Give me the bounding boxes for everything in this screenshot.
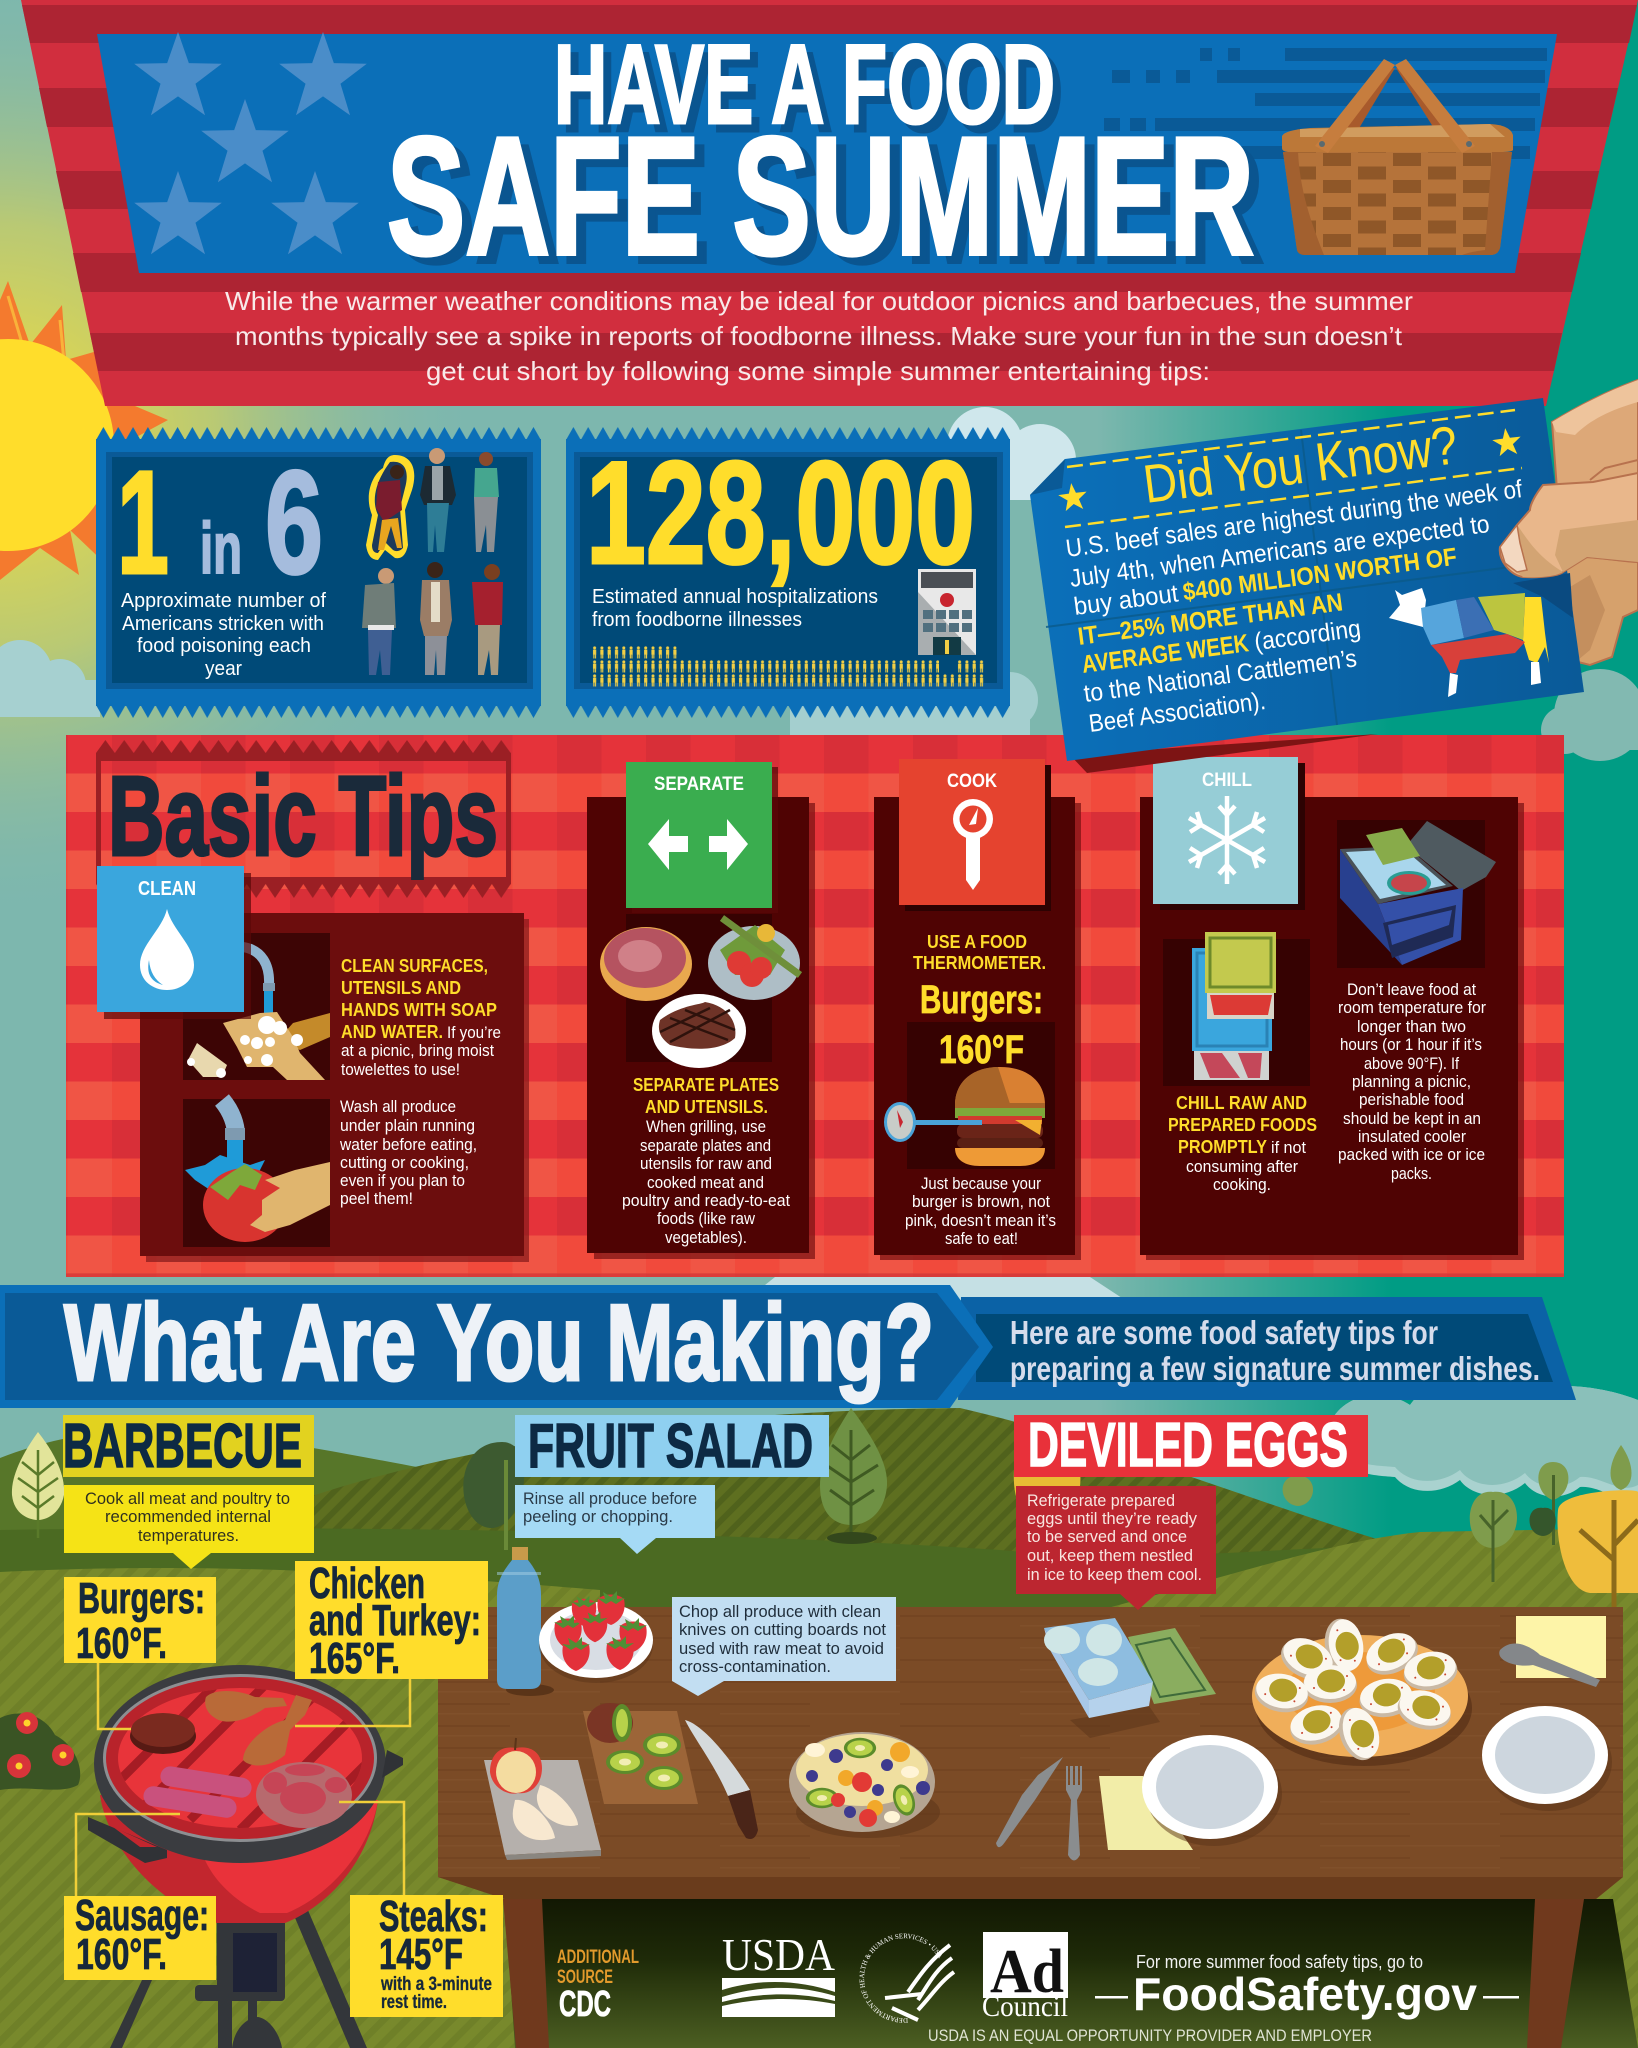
- bush with flowers: [0, 1712, 80, 1790]
- did you know text: [1064, 475, 1524, 738]
- heading: What Are You Making?: [64, 1282, 934, 1404]
- callout: refrigerate eggs: eggs until they’re ready: [1027, 1509, 1197, 1528]
- separate text: AND UTENSILS.: [645, 1097, 768, 1117]
- connector lines: [76, 1663, 410, 1896]
- cook text: burger is brown, not: [912, 1192, 1050, 1211]
- callout: chop produce: knives on cutting boards not: [679, 1620, 886, 1639]
- header banner: [21, 0, 1638, 406]
- people illustration: [362, 448, 503, 675]
- clean text: AND WATER.: [341, 1022, 443, 1042]
- panel: 1 in 6 statistic: [96, 427, 541, 718]
- clean text: cutting or cooking,: [340, 1153, 469, 1172]
- chill text: packs.: [1391, 1164, 1432, 1183]
- image: cooler: [1337, 820, 1496, 968]
- cook text: Burgers:: [920, 978, 1043, 1022]
- chill text: above 90°F). If: [1364, 1054, 1459, 1073]
- cook text: 160°F: [939, 1028, 1024, 1072]
- callout: refrigerate eggs: to be served and once: [1027, 1527, 1187, 1546]
- intro text: [225, 286, 1413, 386]
- callout: cook all meat: recommended internal: [105, 1507, 271, 1526]
- panel: chill: [1140, 757, 1524, 1260]
- callout: rinse produce: [515, 1485, 715, 1554]
- clouds behind statistics: [0, 407, 1638, 1300]
- under table shadow: [505, 1899, 1638, 2048]
- logo: Ad Council: Council: [982, 1990, 1068, 2023]
- title: SAFE SUMMER: [387, 102, 1254, 290]
- logo: Ad Council: [982, 1932, 1068, 2023]
- stars: [134, 32, 367, 254]
- image: burger: [884, 1022, 1055, 1169]
- did you know text: $400 MILLION WORTH OF: [1181, 543, 1458, 607]
- panel: cook: [874, 759, 1081, 1260]
- card: clean: CLEAN: [138, 878, 196, 900]
- illustration: eggs on ice: [1044, 1618, 1216, 1738]
- heading: barbecue: BARBECUE: [63, 1412, 302, 1481]
- call to action: For more summer food safety tips, go to: [1136, 1952, 1423, 1972]
- additional source: CDC: [559, 1983, 611, 2024]
- illustration: kiwi on cutting board: [583, 1703, 698, 1810]
- chill text: PREPARED FOODS: [1168, 1115, 1317, 1135]
- callout: rinse produce: peeling or chopping.: [523, 1507, 673, 1526]
- chill text: planning a picnic,: [1352, 1072, 1471, 1091]
- cook text: Just because your: [921, 1174, 1041, 1193]
- intro text: months typically see a spike in reports of foodborne illness. Make sure your fun in the sun doesn’t: [235, 321, 1403, 351]
- chill text: consuming after: [1186, 1157, 1298, 1176]
- stat caption: Americans stricken with: [122, 613, 324, 635]
- clean text: under plain running: [340, 1116, 475, 1135]
- image: hand washing: [183, 933, 330, 1080]
- icon: finger holding card: [1500, 473, 1638, 577]
- separate text: separate plates and: [640, 1136, 771, 1155]
- image: food containers: [1163, 932, 1310, 1086]
- callout: chop produce: cross-contamination.: [679, 1657, 831, 1676]
- chill text: PROMPTLY: [1178, 1137, 1267, 1157]
- disclaimer: USDA IS AN EQUAL OPPORTUNITY PROVIDER AND EMPLOYER: [928, 2026, 1372, 2045]
- big number: 128,000: [586, 431, 975, 594]
- panel: did you know card: [1030, 398, 1584, 773]
- separate text: utensils for raw and: [640, 1154, 772, 1173]
- illustration: water bottle: [497, 1547, 554, 1696]
- callout: chop produce: used with raw meat to avoid: [679, 1639, 884, 1658]
- ribbon: subheading: [958, 1297, 1576, 1400]
- illustration: knife: [685, 1720, 758, 1839]
- heading: fruit salad: FRUIT SALAD: [528, 1412, 813, 1481]
- separate text: cooked meat and: [647, 1173, 764, 1192]
- heading: basic tips: Basic Tips: [108, 753, 498, 879]
- title: HAVE A FOOD: [562, 30, 1063, 155]
- card: separate: [626, 762, 778, 913]
- did you know text: Beef Association).: [1087, 687, 1267, 738]
- image: washing tomato: [183, 1099, 330, 1247]
- section: barbecue: [63, 1412, 503, 2017]
- people rows: [591, 646, 984, 687]
- separate text: SEPARATE PLATES: [633, 1075, 779, 1095]
- big number: 1: [117, 441, 169, 605]
- blue title panel: [97, 32, 1557, 273]
- heading: did you know: Did You Know?: [1140, 415, 1461, 515]
- stat caption: Estimated annual hospitalizations: [592, 586, 878, 608]
- picnic table: [438, 1607, 1623, 1899]
- heading: deviled eggs: DEVILED EGGS: [1028, 1411, 1348, 1480]
- chill text: insulated cooler: [1358, 1127, 1466, 1146]
- call to action: FoodSafety.gov: [1133, 1968, 1477, 2020]
- cook text: USE A FOOD: [927, 932, 1027, 952]
- title: HAVE A FOOD: [554, 22, 1055, 147]
- additional source: [557, 1947, 639, 2024]
- title: SAFE SUMMER: [397, 110, 1264, 298]
- clean text: peel them!: [340, 1189, 413, 1208]
- icon: hospital: [918, 569, 976, 655]
- additional source: SOURCE: [557, 1967, 613, 1988]
- label: chicken and turkey: and Turkey:: [309, 1596, 481, 1645]
- panel: basic tips tablecloth: [66, 735, 1564, 1277]
- callout: refrigerate eggs: Refrigerate prepared: [1027, 1491, 1175, 1510]
- callout: refrigerate eggs: [1016, 1486, 1216, 1610]
- cook text: safe to eat!: [945, 1229, 1018, 1248]
- chill text: packed with ice or ice: [1338, 1145, 1485, 1164]
- chill text: hours (or 1 hour if it’s: [1340, 1035, 1482, 1054]
- stat caption: food poisoning each: [137, 635, 311, 657]
- clean text: towelettes to use!: [341, 1060, 460, 1079]
- logo: USDA: [722, 1929, 835, 2017]
- label: sausage: 160°F.: [76, 1930, 167, 1979]
- stat caption: [592, 586, 878, 631]
- logo: Ad Council: Ad: [990, 1938, 1064, 2006]
- label: steaks: 145°F: [379, 1930, 463, 1979]
- chill text: CHILL RAW AND: [1176, 1093, 1307, 1113]
- clean text: water before eating,: [339, 1135, 477, 1154]
- illustration: fruit salad bowl: [789, 1732, 940, 1838]
- stars: [1057, 426, 1523, 512]
- label: burgers: Burgers:: [78, 1574, 205, 1623]
- label: steaks: rest time.: [381, 1992, 447, 2013]
- did you know text: U.S. beef sales are highest during the week of: [1064, 475, 1524, 563]
- clean text: UTENSILS AND: [341, 978, 461, 998]
- landscape: [0, 1408, 1638, 2048]
- card: clean: [97, 866, 251, 1019]
- separate text: [622, 1075, 790, 1247]
- grill legs and stand: [110, 1908, 367, 2048]
- banner: what are you making: [0, 1282, 1576, 1408]
- footer logos: [557, 1929, 1519, 2045]
- section: fruit salad: [484, 1412, 940, 1860]
- card: chill: CHILL: [1202, 770, 1252, 791]
- steak: [256, 1762, 352, 1828]
- label: burgers: [64, 1574, 216, 1668]
- separate text: When grilling, use: [646, 1117, 766, 1136]
- icon: picnic basket: [1282, 59, 1513, 255]
- section: deviled eggs: [996, 1411, 1612, 1860]
- heading: basic tips: [96, 740, 511, 898]
- ribbon: subheading: Here are some food safety tips for: [1010, 1314, 1438, 1351]
- illustration: apple on cutting board: [484, 1738, 601, 1860]
- icon: sun: [0, 281, 168, 580]
- cook text: [905, 932, 1056, 1248]
- illustration: kettle grill: [88, 1665, 403, 2048]
- label: sausage: [64, 1891, 216, 1980]
- big number: 6: [265, 441, 323, 605]
- additional source: ADDITIONAL: [557, 1947, 639, 1968]
- callout: cook all meat: temperatures.: [138, 1526, 239, 1545]
- callout: refrigerate eggs: in ice to keep them cool.: [1027, 1565, 1202, 1584]
- label: steaks: with a 3-minute: [380, 1974, 492, 1995]
- separate text: poultry and ready-to-eat: [622, 1191, 790, 1210]
- label: chicken and turkey: [295, 1559, 488, 1683]
- label: chicken and turkey: Chicken: [309, 1559, 425, 1608]
- chill text: room temperature for: [1338, 998, 1486, 1017]
- panel: separate: [587, 762, 815, 1259]
- logo: HHS seal: DEPARTMENT OF HEALTH & HUMAN SERVICES • USA: [859, 1934, 942, 2023]
- label: burgers: 160°F.: [76, 1619, 167, 1668]
- callout: chop produce: [672, 1597, 896, 1696]
- callout: cook all meat: Cook all meat and poultry to: [85, 1489, 290, 1508]
- separate text: vegetables).: [665, 1228, 747, 1247]
- title: [387, 22, 1264, 298]
- cook text: THERMOMETER.: [913, 953, 1046, 973]
- label: chicken and turkey: 165°F.: [309, 1634, 400, 1683]
- illustration: napkin, spoon, plates, cutlery: [996, 1616, 1612, 1860]
- patty: [130, 1713, 196, 1754]
- separate text: foods (like raw: [657, 1209, 756, 1228]
- clean text: [339, 956, 501, 1208]
- table legs: [503, 1899, 1584, 2048]
- did you know text: (according: [1253, 615, 1362, 656]
- panel: 128,000 statistic: [566, 427, 1010, 718]
- clean text: even if you plan to: [340, 1171, 465, 1190]
- intro text: get cut short by following some simple summer entertaining tips:: [426, 356, 1210, 386]
- cook text: pink, doesn’t mean it’s: [905, 1211, 1056, 1230]
- clean text: CLEAN SURFACES,: [341, 956, 488, 976]
- label: sausage: Sausage:: [75, 1891, 209, 1940]
- sausages: [142, 1765, 253, 1819]
- clouds over hills: [1326, 1382, 1638, 1498]
- callout: refrigerate eggs: out, keep them nestled: [1027, 1546, 1193, 1565]
- did you know text: buy about: [1072, 579, 1180, 621]
- label: steaks: [350, 1892, 503, 2017]
- icon: hand behind card: [1552, 380, 1638, 665]
- big number: [117, 441, 323, 605]
- illustration: deviled eggs plate: [1252, 1615, 1472, 1766]
- trees: [12, 1408, 1638, 1610]
- clean text: at a picnic, bring moist: [341, 1041, 494, 1060]
- illustration: strawberries on plate: [539, 1591, 653, 1683]
- chicken: [205, 1691, 312, 1765]
- chill text: Don’t leave food at: [1347, 980, 1476, 999]
- intro text: While the warmer weather conditions may be ideal for outdoor picnics and barbecues, the summer: [225, 286, 1413, 316]
- did you know text: IT—25% MORE THAN AN: [1076, 588, 1344, 651]
- did you know text: to the National Cattlemen’s: [1082, 644, 1358, 708]
- card: chill: [1153, 757, 1305, 910]
- logo: USDA: USDA: [722, 1929, 835, 1980]
- chill text: if not: [1271, 1138, 1306, 1157]
- image: plates of meat: [600, 914, 800, 1068]
- stat caption: [121, 590, 326, 680]
- stat caption: Approximate number of: [121, 590, 326, 612]
- label: steaks: Steaks:: [379, 1892, 488, 1941]
- did you know text: July 4th, when Americans are expected to: [1068, 510, 1491, 593]
- stat caption: from foodborne illnesses: [592, 609, 802, 631]
- callout: chop produce: Chop all produce with clean: [679, 1602, 881, 1621]
- call to action: [1095, 1952, 1519, 2020]
- did you know text: AVERAGE WEEK: [1080, 629, 1250, 679]
- callout: rinse produce: Rinse all produce before: [523, 1489, 697, 1508]
- chill text: longer than two: [1357, 1017, 1466, 1036]
- panel: clean: [97, 866, 529, 1262]
- chill text: perishable food: [1359, 1090, 1464, 1109]
- clean text: If you’re: [447, 1023, 501, 1042]
- big number: in: [200, 509, 242, 589]
- callout: cook all meat: [64, 1485, 314, 1569]
- stat caption: year: [205, 658, 242, 680]
- chill text: [1168, 980, 1486, 1194]
- clean text: Wash all produce: [340, 1097, 456, 1116]
- chill text: cooking.: [1213, 1175, 1271, 1194]
- chill text: should be kept in an: [1343, 1109, 1481, 1128]
- clean text: HANDS WITH SOAP: [341, 1000, 497, 1020]
- card: cook: COOK: [947, 771, 997, 792]
- icon: cow: [1389, 588, 1549, 697]
- card: cook: [899, 759, 1051, 911]
- card: separate: SEPARATE: [654, 774, 744, 795]
- grill handle: [88, 1750, 403, 1863]
